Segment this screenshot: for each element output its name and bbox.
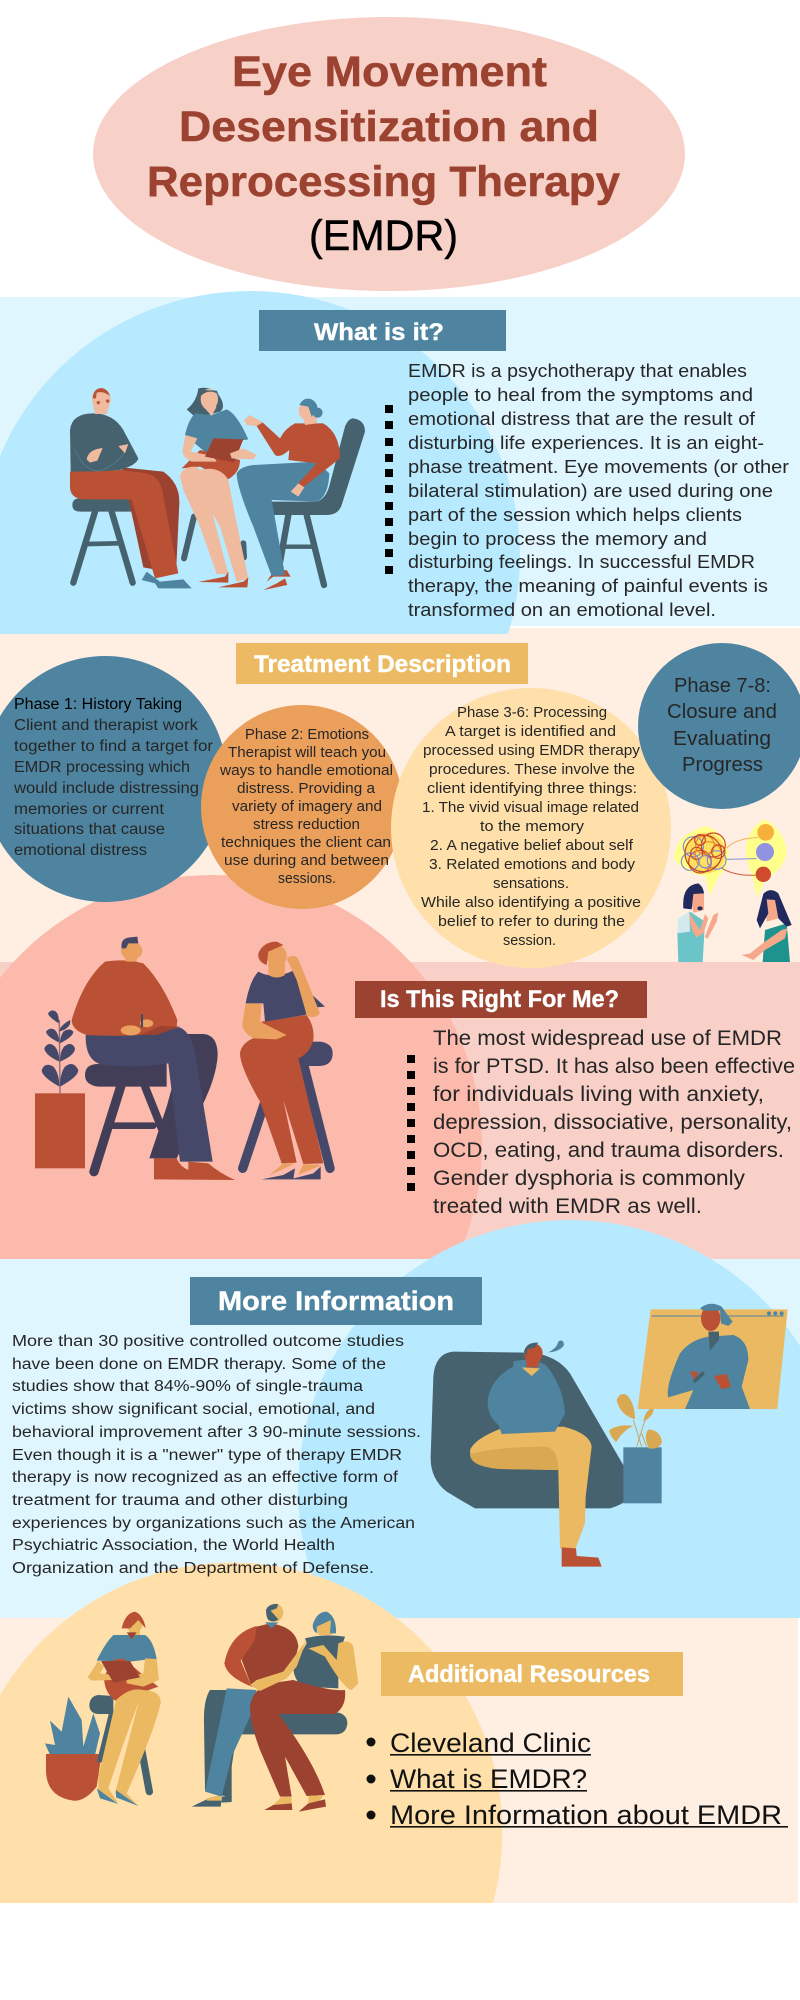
- phase 3-6 bubble: procedures. These involve the: [429, 762, 635, 778]
- phase 3-6 bubble: [391, 688, 671, 968]
- illustration: telehealth session with therapist on screen: [431, 1304, 788, 1567]
- phase 2 bubble: variety of imagery and: [232, 799, 382, 815]
- text: evidence for EMDR: have been done on EMDR therapy. Some of the: [12, 1356, 386, 1373]
- text: what is it description: disturbing life experiences. It is an eight-: [408, 433, 764, 453]
- list of resource links: What is EMDR?: [390, 1764, 587, 1794]
- phase 2 bubble: stress reduction: [253, 817, 360, 833]
- phase 3-6 bubble: 1. The vivid visual image related: [422, 800, 639, 816]
- phase 3-6 bubble: sensations.: [493, 876, 569, 892]
- phase 3-6 bubble: session.: [503, 933, 556, 949]
- list of resource links: Cleveland Clinic: [390, 1728, 591, 1758]
- text: who EMDR helps: treated with EMDR as well.: [433, 1194, 702, 1218]
- title: [93, 17, 685, 291]
- phase 3-6 bubble: 2. A negative belief about self: [430, 838, 634, 854]
- panel: treatment description: [0, 628, 800, 968]
- phase 2 bubble: [201, 705, 403, 909]
- list of resource links: More Information about EMDR: [390, 1800, 782, 1830]
- phase 1 bubble: memories or current: [14, 801, 165, 818]
- text: evidence for EMDR: More than 30 positive controlled outcome studies: [12, 1333, 404, 1350]
- text: who EMDR helps: is for PTSD. It has also been effective: [433, 1054, 795, 1078]
- phase 1 bubble: together to find a target for: [14, 738, 213, 755]
- title: Eye Movement: [232, 48, 547, 96]
- illustration: therapist with plant and seated couple: [45, 1604, 358, 1812]
- phase 3-6 bubble: processed using EMDR therapy: [423, 743, 641, 759]
- phase 7-8 bubble: Evaluating: [673, 728, 771, 750]
- text: what is it description: begin to process the memory and: [408, 529, 707, 549]
- title: Reprocessing Therapy: [147, 158, 620, 206]
- phase 7-8 bubble: Progress: [682, 754, 763, 776]
- heading: is this right for me: Is This Right For Me?: [380, 986, 619, 1013]
- list of resource links: [366, 1728, 788, 1830]
- phase 2 bubble: sessions.: [278, 871, 336, 887]
- phase 2 bubble: techniques the client can: [221, 835, 391, 851]
- text: what is it description: transformed on an emotional level.: [408, 600, 716, 620]
- phase 1 bubble: emotional distress: [14, 842, 147, 859]
- text: what is it description: emotional distress that are the result of: [408, 409, 756, 429]
- divider: dotted line: [407, 1055, 415, 1191]
- title: Desensitization and: [179, 103, 599, 151]
- illustration: two people sharing tangled and sorted thoughts: [674, 819, 792, 962]
- heading: more information: [190, 1277, 482, 1325]
- text: evidence for EMDR: Even though it is a "newer" type of therapy EMDR: [12, 1447, 402, 1464]
- phase 7-8 bubble: Phase 7-8:: [674, 675, 771, 697]
- text: what is it description: people to heal from the symptoms and: [408, 385, 753, 405]
- text: evidence for EMDR: studies show that 84%-90% of single-trauma: [12, 1378, 363, 1395]
- text: evidence for EMDR: Psychiatric Association, the World Health: [12, 1537, 335, 1554]
- phase 2 bubble: Phase 2: Emotions: [245, 727, 369, 743]
- heading: what is it: [259, 310, 506, 351]
- phase 3-6 bubble: belief to refer to during the: [438, 914, 625, 930]
- panel: additional resources: [0, 1604, 798, 1903]
- heading: what is it: What is it?: [314, 319, 444, 346]
- phase 2 bubble: Therapist will teach you: [228, 745, 386, 761]
- phase 1 bubble: Phase 1: History Taking: [14, 696, 182, 713]
- panel: is this right for me: [0, 937, 800, 1259]
- text: what is it description: bilateral stimulation) are used during one: [408, 481, 773, 501]
- phase 3-6 bubble: Phase 3-6: Processing: [457, 705, 607, 721]
- text: evidence for EMDR: [12, 1333, 421, 1577]
- text: what is it description: therapy, the meaning of painful events is: [408, 576, 768, 596]
- phase 2 bubble: use during and between: [224, 853, 389, 869]
- heading: more information: More Information: [218, 1286, 454, 1316]
- text: who EMDR helps: [433, 1026, 795, 1218]
- text: who EMDR helps: for individuals living with anxiety,: [433, 1082, 764, 1106]
- phase 1 bubble: would include distressing: [13, 780, 199, 797]
- phase 1 bubble: [0, 656, 227, 902]
- text: evidence for EMDR: Organization and the Department of Defense.: [12, 1560, 374, 1577]
- text: who EMDR helps: The most widespread use of EMDR: [433, 1026, 782, 1050]
- illustration: man and woman seated with plant: [35, 937, 333, 1180]
- text: evidence for EMDR: victims show significant social, emotional, and: [12, 1401, 375, 1418]
- text: who EMDR helps: OCD, eating, and trauma disorders.: [433, 1138, 784, 1162]
- divider: dotted line: [385, 405, 393, 574]
- phase 2 bubble: distress. Providing a: [237, 781, 376, 797]
- text: what is it description: phase treatment. Eye movements (or other: [408, 457, 789, 477]
- text: evidence for EMDR: experiences by organizations such as the American: [12, 1515, 415, 1532]
- phase 1 bubble: EMDR processing which: [14, 759, 190, 776]
- phase 7-8 bubble: Closure and: [667, 701, 777, 723]
- phase 3-6 bubble: While also identifying a positive: [421, 895, 641, 911]
- text: what is it description: part of the session which helps clients: [408, 505, 742, 525]
- text: what is it description: EMDR is a psychotherapy that enables: [408, 361, 747, 381]
- heading: treatment description: Treatment Description: [254, 651, 511, 678]
- phase 1 bubble: Client and therapist work: [14, 717, 198, 734]
- phase 3-6 bubble: to the memory: [480, 819, 585, 835]
- text: who EMDR helps: depression, dissociative, personality,: [433, 1110, 792, 1134]
- text: who EMDR helps: Gender dysphoria is commonly: [433, 1166, 745, 1190]
- heading: additional resources: [381, 1652, 683, 1696]
- text: what is it description: [408, 361, 789, 620]
- panel: what is it: [0, 297, 800, 626]
- text: evidence for EMDR: therapy is now recognized as an effective form of: [12, 1469, 399, 1486]
- heading: additional resources: Additional Resources: [408, 1661, 650, 1688]
- text: evidence for EMDR: behavioral improvement after 3 90-minute sessions.: [12, 1424, 421, 1441]
- heading: is this right for me: [355, 981, 647, 1018]
- phase 2 bubble: ways to handle emotional: [219, 763, 393, 779]
- panel: more information: [0, 1259, 800, 1618]
- phase 3-6 bubble: A target is identified and: [445, 724, 616, 740]
- phase 3-6 bubble: 3. Related emotions and body: [429, 857, 636, 873]
- title: (EMDR): [309, 212, 458, 260]
- phase 1 bubble: situations that cause: [14, 821, 165, 838]
- heading: treatment description: [236, 643, 528, 684]
- text: what is it description: disturbing feelings. In successful EMDR: [408, 552, 755, 572]
- phase 3-6 bubble: client identifying three things:: [427, 781, 637, 797]
- illustration: three people in conversation on chairs: [70, 388, 365, 590]
- text: evidence for EMDR: treatment for trauma and other disturbing: [12, 1492, 348, 1509]
- phase 7-8 bubble: [638, 643, 800, 809]
